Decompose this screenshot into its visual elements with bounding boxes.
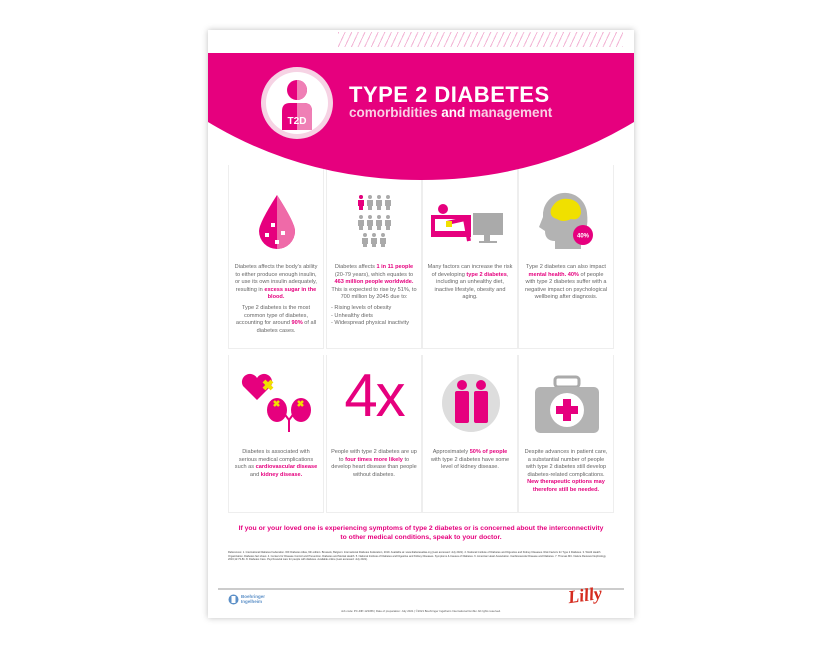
footer text: Job code: PC-DIP-123456 | Date of preparation: July 2021 | ©2021 Boehringer Ingelheim International GmbH. All rights reserved.: [341, 609, 501, 613]
text block: - Rising levels of obesity: [331, 305, 391, 311]
panel: row2 col4: [518, 355, 614, 513]
decorative stripes: [338, 32, 623, 47]
panel: row1 col4: [518, 165, 614, 349]
icon: T2D person circle: [261, 67, 333, 139]
icon: couch and tv: [431, 204, 503, 243]
logo: Boehringer Ingelheim: Ingelheim: [241, 599, 262, 604]
panel: row1 col2: [326, 165, 422, 349]
big stat: 4x: 4x: [344, 362, 404, 429]
icon: T2D person circle: T2D: [288, 116, 306, 127]
text block: Diabetes affects the body's ability to either produce enough insulin, or use its own insulin adequately, resulting in excess sugar in the blood.: [235, 264, 317, 300]
page: [208, 30, 634, 618]
subtitle: comorbidities and management: [349, 105, 552, 120]
title: TYPE 2 DIABETES: [349, 82, 550, 107]
icon: medical kit: [535, 376, 599, 433]
header band: [208, 53, 634, 180]
logo: Boehringer Ingelheim: Boehringer: [241, 594, 265, 599]
text block: - Unhealthy diets: [331, 313, 373, 319]
panel: row1 col3: [422, 165, 518, 349]
text block: Many factors can increase the risk of developing type 2 diabetes, including an unhealthy diet, inactive lifestyle, obesity and aging.: [428, 264, 512, 300]
callout: If you or your loved one is experiencing symptoms of type 2 diabetes or is concerned about the interconnectivity to other medical conditions, speak to your doctor.: [239, 525, 603, 541]
text block: Diabetes is associated with serious medical complications such as cardiovascular disease and kidney disease.: [235, 449, 317, 478]
icon: heart and kidneys: [242, 374, 311, 432]
panel: row2 col1: [228, 355, 324, 513]
panel: row1 col1: [228, 165, 324, 349]
text block: Despite advances in patient care, a substantial number of people with type 2 diabetes still develop diabetes-related complications. New therapeutic options may therefore still be needed.: [525, 449, 607, 493]
text block: Type 2 diabetes can also impact mental health. 40% of people with type 2 diabetes suffer with a negative impact on psychological wellbeing after diagnosis.: [525, 264, 607, 300]
icon: two people globe: [442, 374, 500, 432]
text block: Diabetes affects 1 in 11 people (20-79 years), which equates to 463 million people worldwide. This is expected to rise by 51%, to 700 million by 2045 due to:: [331, 264, 417, 300]
text block: Type 2 diabetes is the most common type of diabetes, accounting for around 90% of all diabetes cases.: [236, 305, 316, 334]
divider: [218, 588, 624, 590]
text block: [331, 264, 417, 326]
panel: row2 col2: [326, 355, 422, 513]
icon: head with brain: [539, 192, 593, 249]
icon: people: [358, 195, 391, 247]
text block: [235, 264, 318, 334]
text block: People with type 2 diabetes are up to four times more likely to develop heart disease than people without diabetes.: [331, 449, 417, 478]
icon: head with brain: 40%: [577, 234, 590, 240]
logo: Lilly: Lilly: [567, 583, 603, 607]
icon: blood drop: [259, 195, 295, 249]
logo: Boehringer Ingelheim: [228, 594, 265, 604]
panel: row2 col3: [422, 355, 518, 513]
text block: Approximately 50% of people with type 2 diabetes have some level of kidney disease.: [431, 449, 509, 470]
references: References: 1. International Diabetes Federation. IDF Diabetes Atlas, 9th edition. Brussels, Belgium: International Diabetes Federation, 2019. Available at: www.diabetesatlas.org (Last accessed: July 2021). 2. National Institute of Diabetes and Digestive and Kidney Diseases. Risk Factors for Type 2 Diabetes. 3. World Health Organization. Diabetes fact sheet. 4. Centers for Disease Control and Prevention. Diabetes and Mental Health. 5. National Institute of Diabetes and Digestive and Kidney Diseases. Symptoms & Causes of Diabetes. 6. American Heart Association. Cardiovascular Disease and Diabetes. 7. Thomas MC. Nature Reviews Nephrology 2016;12:73-81. 8. Diabetes Care. Psychosocial care for people with diabetes. Available online (Last accessed: July 2021).: [228, 551, 606, 561]
text block: - Widespread physical inactivity: [331, 320, 409, 326]
